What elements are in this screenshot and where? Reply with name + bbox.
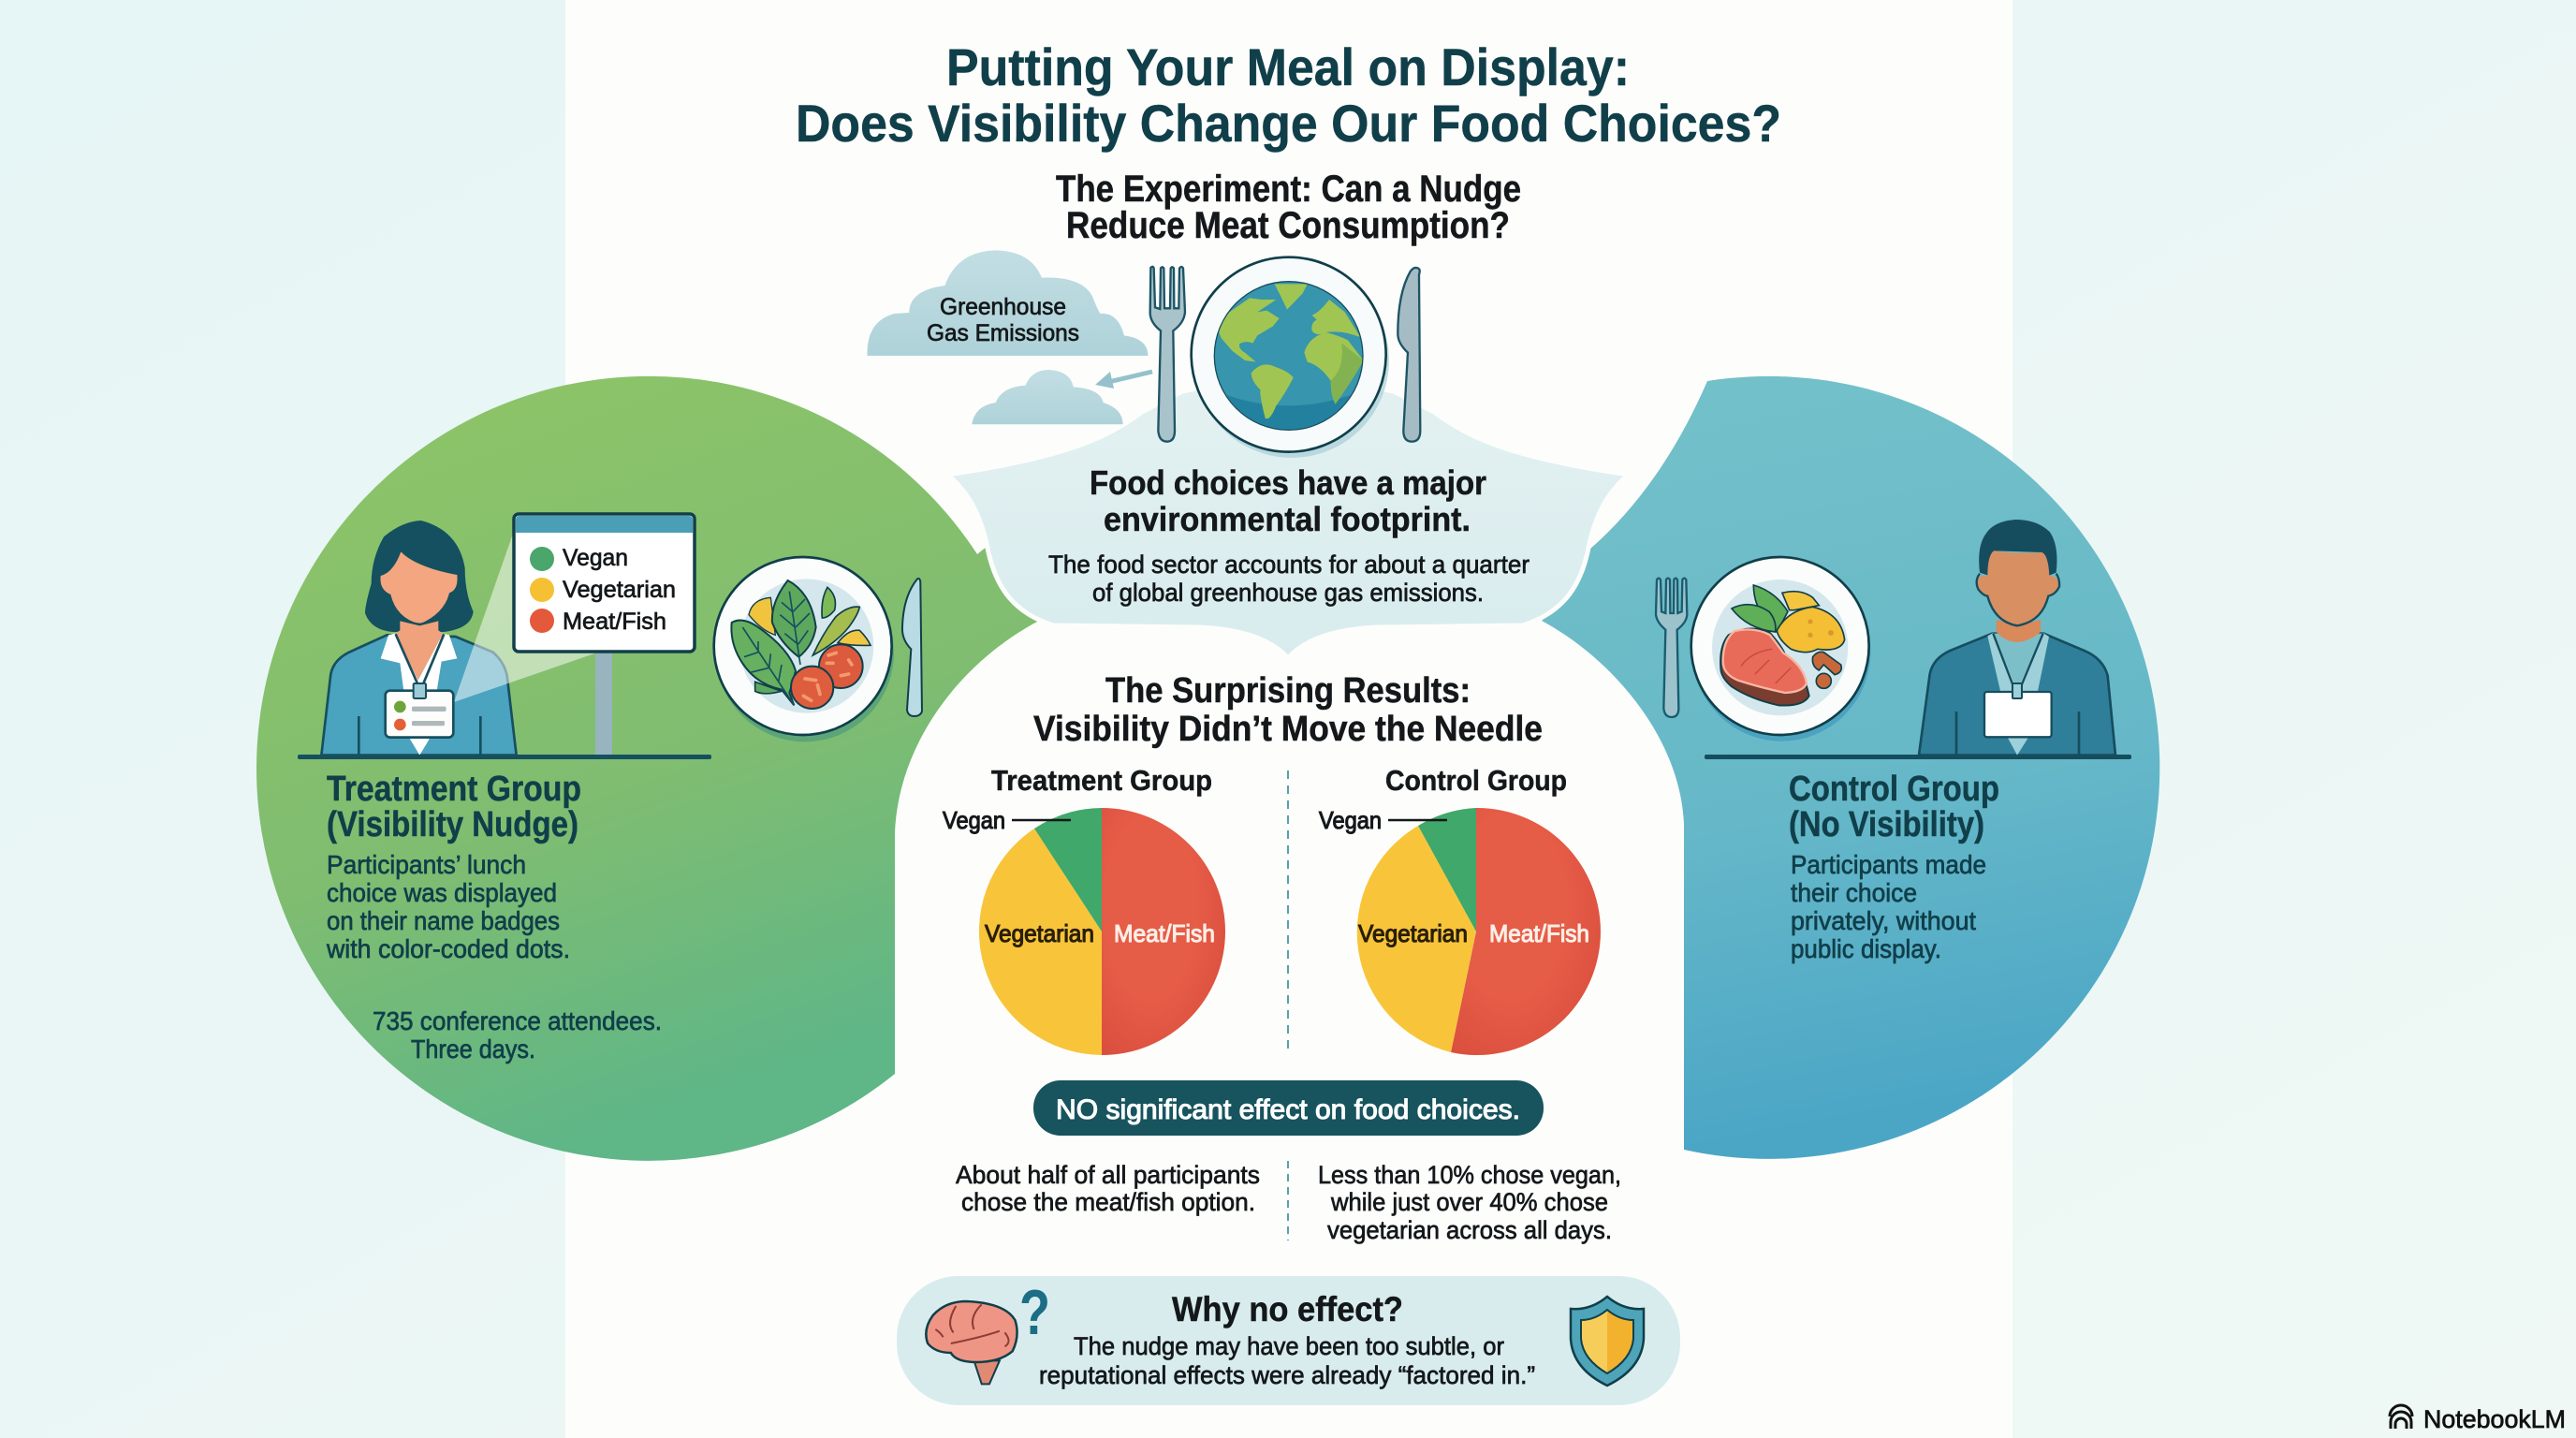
divider [1287,1161,1289,1240]
pie chart: treatment group [943,764,1225,1055]
light beam from badge to sign [454,534,597,702]
ground line [1705,755,2131,759]
pie chart: control group: Meat/Fish [1489,919,1589,947]
text: treatment description: Participants’ lunch [327,850,526,879]
text: sample size [373,1006,662,1064]
text: treatment description [326,850,570,963]
callout: no significant effect [1033,1080,1544,1136]
title: Putting Your Meal on Display: [946,37,1630,96]
icon: fork [1150,267,1185,442]
text: control description [1791,850,1986,963]
icon: plate with globe [1192,257,1389,458]
heading: the surprising results: Visibility Didn’t Move the Needle [1033,710,1543,749]
text: environmental footprint: Food choices have a major [1090,463,1486,502]
pie chart: treatment group: Vegetarian [985,919,1094,947]
cloud: greenhouse gas emissions [868,250,1148,356]
display sign: Vegan [563,545,628,571]
text: meat finding [956,1161,1260,1216]
text: vegan finding: Less than 10% chose vegan, [1318,1161,1621,1189]
display sign [514,514,695,652]
text: treatment description: choice was displayed [327,878,557,907]
text: sample size: Three days. [411,1034,535,1064]
text: sample size: 735 conference attendees. [373,1006,662,1035]
cloud: greenhouse gas emissions: Gas Emissions [927,320,1079,346]
heading: the experiment: Reduce Meat Consumption? [1066,205,1510,246]
white centre panel [565,0,2012,1438]
icon: shield [1571,1297,1644,1386]
heading: the experiment [1056,169,1521,246]
pie chart: control group: Vegetarian [1358,919,1468,947]
sign post [595,652,612,755]
icon: question mark: ? [1019,1277,1050,1348]
text: why no effect: Why no effect? [1172,1290,1403,1328]
icon: steak plate [1691,557,1870,741]
heading: control group [1789,770,1999,844]
pie chart: treatment group: Vegan [943,806,1005,834]
brand: NotebookLM: NotebookLM [2423,1405,2566,1433]
text: environmental footprint: of global greenhouse gas emissions. [1092,579,1484,607]
text: control description: Participants made [1791,850,1986,879]
text: environmental footprint: environmental footprint. [1104,500,1471,538]
cloud: greenhouse gas emissions: Greenhouse [940,294,1066,320]
panel: why no effect [897,1276,1680,1405]
text: why no effect: The nudge may have been too subtle, or [1074,1332,1504,1360]
title: Does Visibility Change Our Food Choices? [796,94,1781,153]
arrow: emissions [1095,372,1152,389]
pie chart: control group: Vegan [1319,806,1382,834]
pie chart: treatment group: Meat/Fish [1114,919,1215,947]
heading: control group: Control Group [1789,770,1999,809]
text: vegan finding: while just over 40% chose [1330,1188,1608,1216]
icon: knife [1398,268,1420,442]
text: vegan finding [1318,1161,1621,1244]
heading: treatment group [327,770,581,844]
name badge [386,683,453,738]
icon: knife [902,579,922,716]
icon: brain [926,1301,1017,1384]
text: control description: their choice [1791,878,1917,907]
text: why no effect [1039,1290,1535,1389]
icon: fork [1656,579,1687,717]
pie chart: treatment group: Treatment Group [991,764,1212,797]
ground line [298,755,711,759]
text: treatment description: on their name badges [327,906,560,935]
text: environmental footprint [1048,463,1530,607]
heading: control group: (No Visibility) [1789,805,1984,844]
text: control description: privately, without [1791,906,1976,935]
heading: the experiment: The Experiment: Can a Nudge [1056,169,1521,210]
text: meat finding: About half of all participants [956,1161,1260,1189]
heading: treatment group: Treatment Group [327,770,581,809]
text: treatment description: with color-coded dots. [326,934,570,963]
icon: man with blank badge [1919,520,2115,756]
heading: the surprising results: The Surprising Results: [1105,671,1471,711]
display sign: Vegetarian [563,577,676,603]
pie chart: control group [1319,764,1601,1055]
cloud: small [972,370,1123,424]
callout: no significant effect: NO significant effect on food choices. [1056,1094,1520,1125]
heading: treatment group: (Visibility Nudge) [327,805,578,844]
pie chart: control group: Control Group [1385,764,1567,797]
text: control description: public display. [1791,934,1941,963]
blank badge [1984,683,2052,737]
text: why no effect: reputational effects were already “factored in.” [1039,1361,1535,1389]
text: meat finding: chose the meat/fish option. [961,1188,1255,1216]
divider [1287,770,1289,1055]
display sign: Meat/Fish [563,609,666,635]
panel: control group [1542,376,2159,1159]
teal circular background [1542,376,2159,1159]
icon: woman with badge [321,521,517,756]
icon: salad plate [714,557,894,741]
panel: treatment group [256,376,1039,1161]
central context bubble [947,370,1629,658]
text: environmental footprint: The food sector accounts for about a quarter [1048,550,1530,579]
title [796,37,1781,153]
green circular background [256,376,1039,1161]
heading: the surprising results [1033,671,1543,749]
text: vegan finding: vegetarian across all days. [1327,1216,1612,1244]
